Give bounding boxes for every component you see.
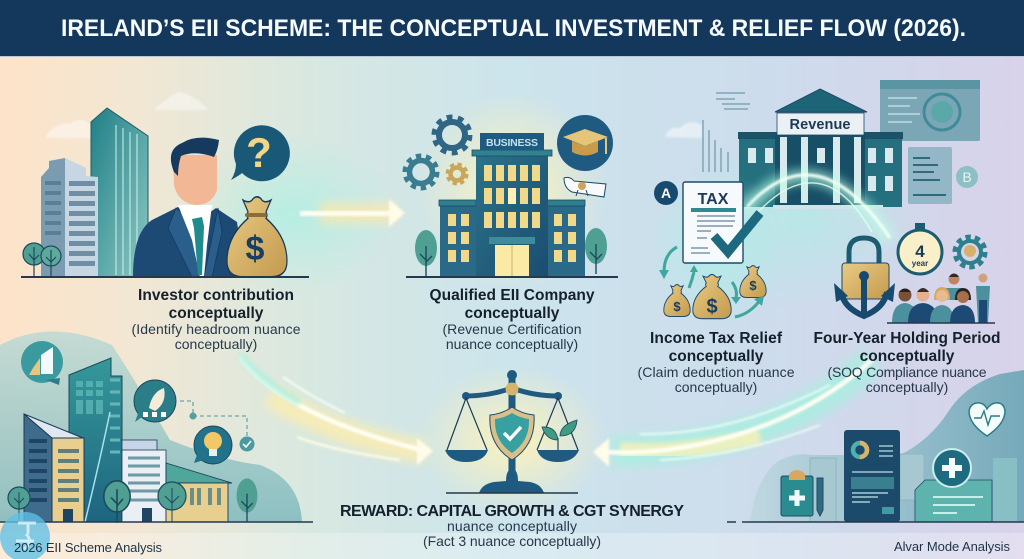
icon: teal tower bbox=[91, 108, 148, 277]
report panel bbox=[908, 147, 952, 204]
illustration: income tax relief bbox=[648, 170, 784, 330]
icon: gears bbox=[406, 118, 469, 187]
text: four-year holding period: Four-Year Holding Period bbox=[814, 330, 1000, 347]
text: income tax relief bbox=[638, 330, 795, 395]
icon: plus badge bbox=[933, 449, 971, 487]
icon: diploma scroll bbox=[564, 177, 606, 197]
icon: money bag: $ bbox=[246, 230, 265, 268]
icon: gear with person bbox=[956, 238, 984, 266]
dashboard panel bbox=[880, 80, 980, 141]
icon: tax document: TAX bbox=[698, 191, 729, 208]
icon: four year stopwatch: 4 bbox=[915, 242, 925, 261]
icon: letter A badge bbox=[654, 181, 678, 205]
text: investor contribution: conceptually) bbox=[175, 336, 257, 352]
decorative pillars bbox=[993, 458, 1017, 522]
background panels bbox=[810, 454, 924, 522]
illustration: four-year holding period bbox=[834, 223, 995, 323]
revenue sign: Revenue bbox=[790, 117, 850, 133]
text: income tax relief: conceptually) bbox=[675, 379, 757, 395]
icon: slanted building bbox=[24, 414, 84, 522]
icon: money bags with arrows: $ bbox=[749, 278, 757, 293]
icon: tall teal tower bbox=[69, 358, 122, 522]
ground line bbox=[887, 322, 995, 324]
icon: clipboard bbox=[781, 470, 813, 516]
icon: group of people bbox=[892, 274, 990, 323]
illustration: qualified EII company bbox=[406, 115, 618, 277]
text: investor contribution: conceptually bbox=[169, 305, 264, 322]
text: reward: (Fact 3 nuance conceptually) bbox=[423, 533, 601, 549]
icon: heart monitor bbox=[969, 403, 1005, 436]
illustration: investor with buildings bbox=[21, 92, 309, 277]
icon: growth chart bubble bbox=[21, 341, 63, 385]
icon: tablet dashboard bbox=[844, 430, 900, 522]
text: four-year holding period: conceptually) bbox=[866, 379, 948, 395]
arrow: holding period to reward bbox=[593, 360, 872, 467]
text: four-year holding period bbox=[814, 330, 1000, 395]
text: income tax relief: (Claim deduction nuance bbox=[638, 364, 795, 380]
shield bbox=[490, 407, 534, 460]
icon: rocket bubble bbox=[134, 380, 176, 422]
text: qualified EII company: conceptually bbox=[465, 305, 560, 322]
icon: anchor bbox=[834, 271, 895, 319]
icon: small trees bbox=[23, 243, 61, 277]
text: qualified EII company: nuance conceptually) bbox=[446, 336, 578, 352]
icon: grey office building bbox=[41, 158, 98, 277]
hill backdrop bbox=[0, 332, 302, 522]
footer note left: 2026 EII Scheme Analysis bbox=[14, 540, 162, 555]
icon: money bags with arrows: $ bbox=[706, 296, 718, 318]
text: four-year holding period: (SOQ Compliance nuance bbox=[828, 364, 987, 380]
text: investor contribution: (Identify headroom nuance bbox=[132, 321, 301, 337]
text: investor contribution bbox=[132, 287, 301, 352]
text: income tax relief: conceptually bbox=[669, 348, 764, 365]
icon: medical folder bbox=[915, 480, 992, 522]
icon: connector lines bbox=[180, 401, 247, 436]
business sign: BUSINESS bbox=[486, 137, 538, 149]
icon: city trees bbox=[8, 478, 257, 523]
text: qualified EII company bbox=[430, 287, 595, 352]
icon: business building bbox=[439, 133, 585, 277]
icon: low yellow building bbox=[166, 463, 232, 522]
title bar bbox=[0, 0, 1024, 57]
text: qualified EII company: Qualified EII Company bbox=[430, 287, 595, 304]
illustration: startup city bbox=[0, 332, 313, 523]
icon: investor figure bbox=[133, 138, 245, 277]
text: four-year holding period: conceptually bbox=[860, 348, 955, 365]
hill backdrop bbox=[750, 370, 1024, 522]
ground line bbox=[727, 521, 1024, 523]
icon: question speech bubble: ? bbox=[246, 129, 272, 176]
ground line bbox=[0, 521, 313, 523]
icon: graduation cap badge bbox=[557, 115, 613, 171]
text: investor contribution: Investor contribution bbox=[138, 287, 294, 304]
icon: letter B badge: B bbox=[962, 169, 972, 185]
icon: question speech bubble bbox=[231, 125, 290, 181]
text: reward: REWARD: CAPITAL GROWTH & CGT SYNERGY bbox=[340, 503, 684, 520]
icon: padlock bbox=[842, 238, 889, 299]
icon: white building bbox=[122, 440, 166, 522]
left pan bbox=[445, 450, 488, 462]
icon: scales of justice with shield bbox=[445, 370, 579, 493]
text: qualified EII company: (Revenue Certification bbox=[442, 321, 582, 337]
icon: revenue building bbox=[738, 89, 903, 209]
data lines bbox=[703, 93, 750, 172]
icon: tax document bbox=[683, 182, 743, 263]
base bbox=[479, 468, 544, 493]
plant bbox=[542, 420, 577, 450]
text: reward: nuance conceptually bbox=[447, 518, 577, 534]
arrow: investor to reward bbox=[240, 355, 433, 465]
illustration: revenue building and data panels bbox=[665, 80, 980, 240]
icon: letter B badge bbox=[956, 166, 978, 188]
text: income tax relief: Income Tax Relief bbox=[650, 330, 783, 347]
icon: money bags with arrows bbox=[659, 247, 766, 319]
icon: light bulb bubble bbox=[194, 426, 232, 464]
illustration: digital records bbox=[727, 370, 1024, 522]
icon: check badge bbox=[240, 436, 254, 452]
icon: pencil bbox=[817, 478, 823, 516]
footer note right: Alvar Mode Analysis bbox=[894, 539, 1010, 554]
icon: check mark bbox=[714, 213, 760, 252]
icon: money bag bbox=[227, 197, 287, 277]
footer strip bbox=[0, 533, 1024, 559]
title: IRELAND’S EII SCHEME: THE CONCEPTUAL INVESTMENT & RELIEF FLOW (2026). bbox=[61, 15, 966, 42]
arc: income tax to holding period bbox=[745, 175, 890, 240]
icon: trees bbox=[415, 228, 607, 276]
ground line bbox=[406, 276, 618, 278]
icon: four year stopwatch bbox=[898, 223, 942, 274]
icon: letter A badge: A bbox=[661, 185, 671, 201]
text: reward bbox=[340, 503, 684, 549]
icon: money bags with arrows: $ bbox=[673, 299, 681, 314]
right pan bbox=[537, 450, 579, 462]
logo watermark bbox=[0, 512, 50, 559]
ground line bbox=[21, 276, 309, 278]
arrow: investor to company bbox=[300, 199, 405, 227]
icon: four year stopwatch: year bbox=[912, 259, 928, 268]
